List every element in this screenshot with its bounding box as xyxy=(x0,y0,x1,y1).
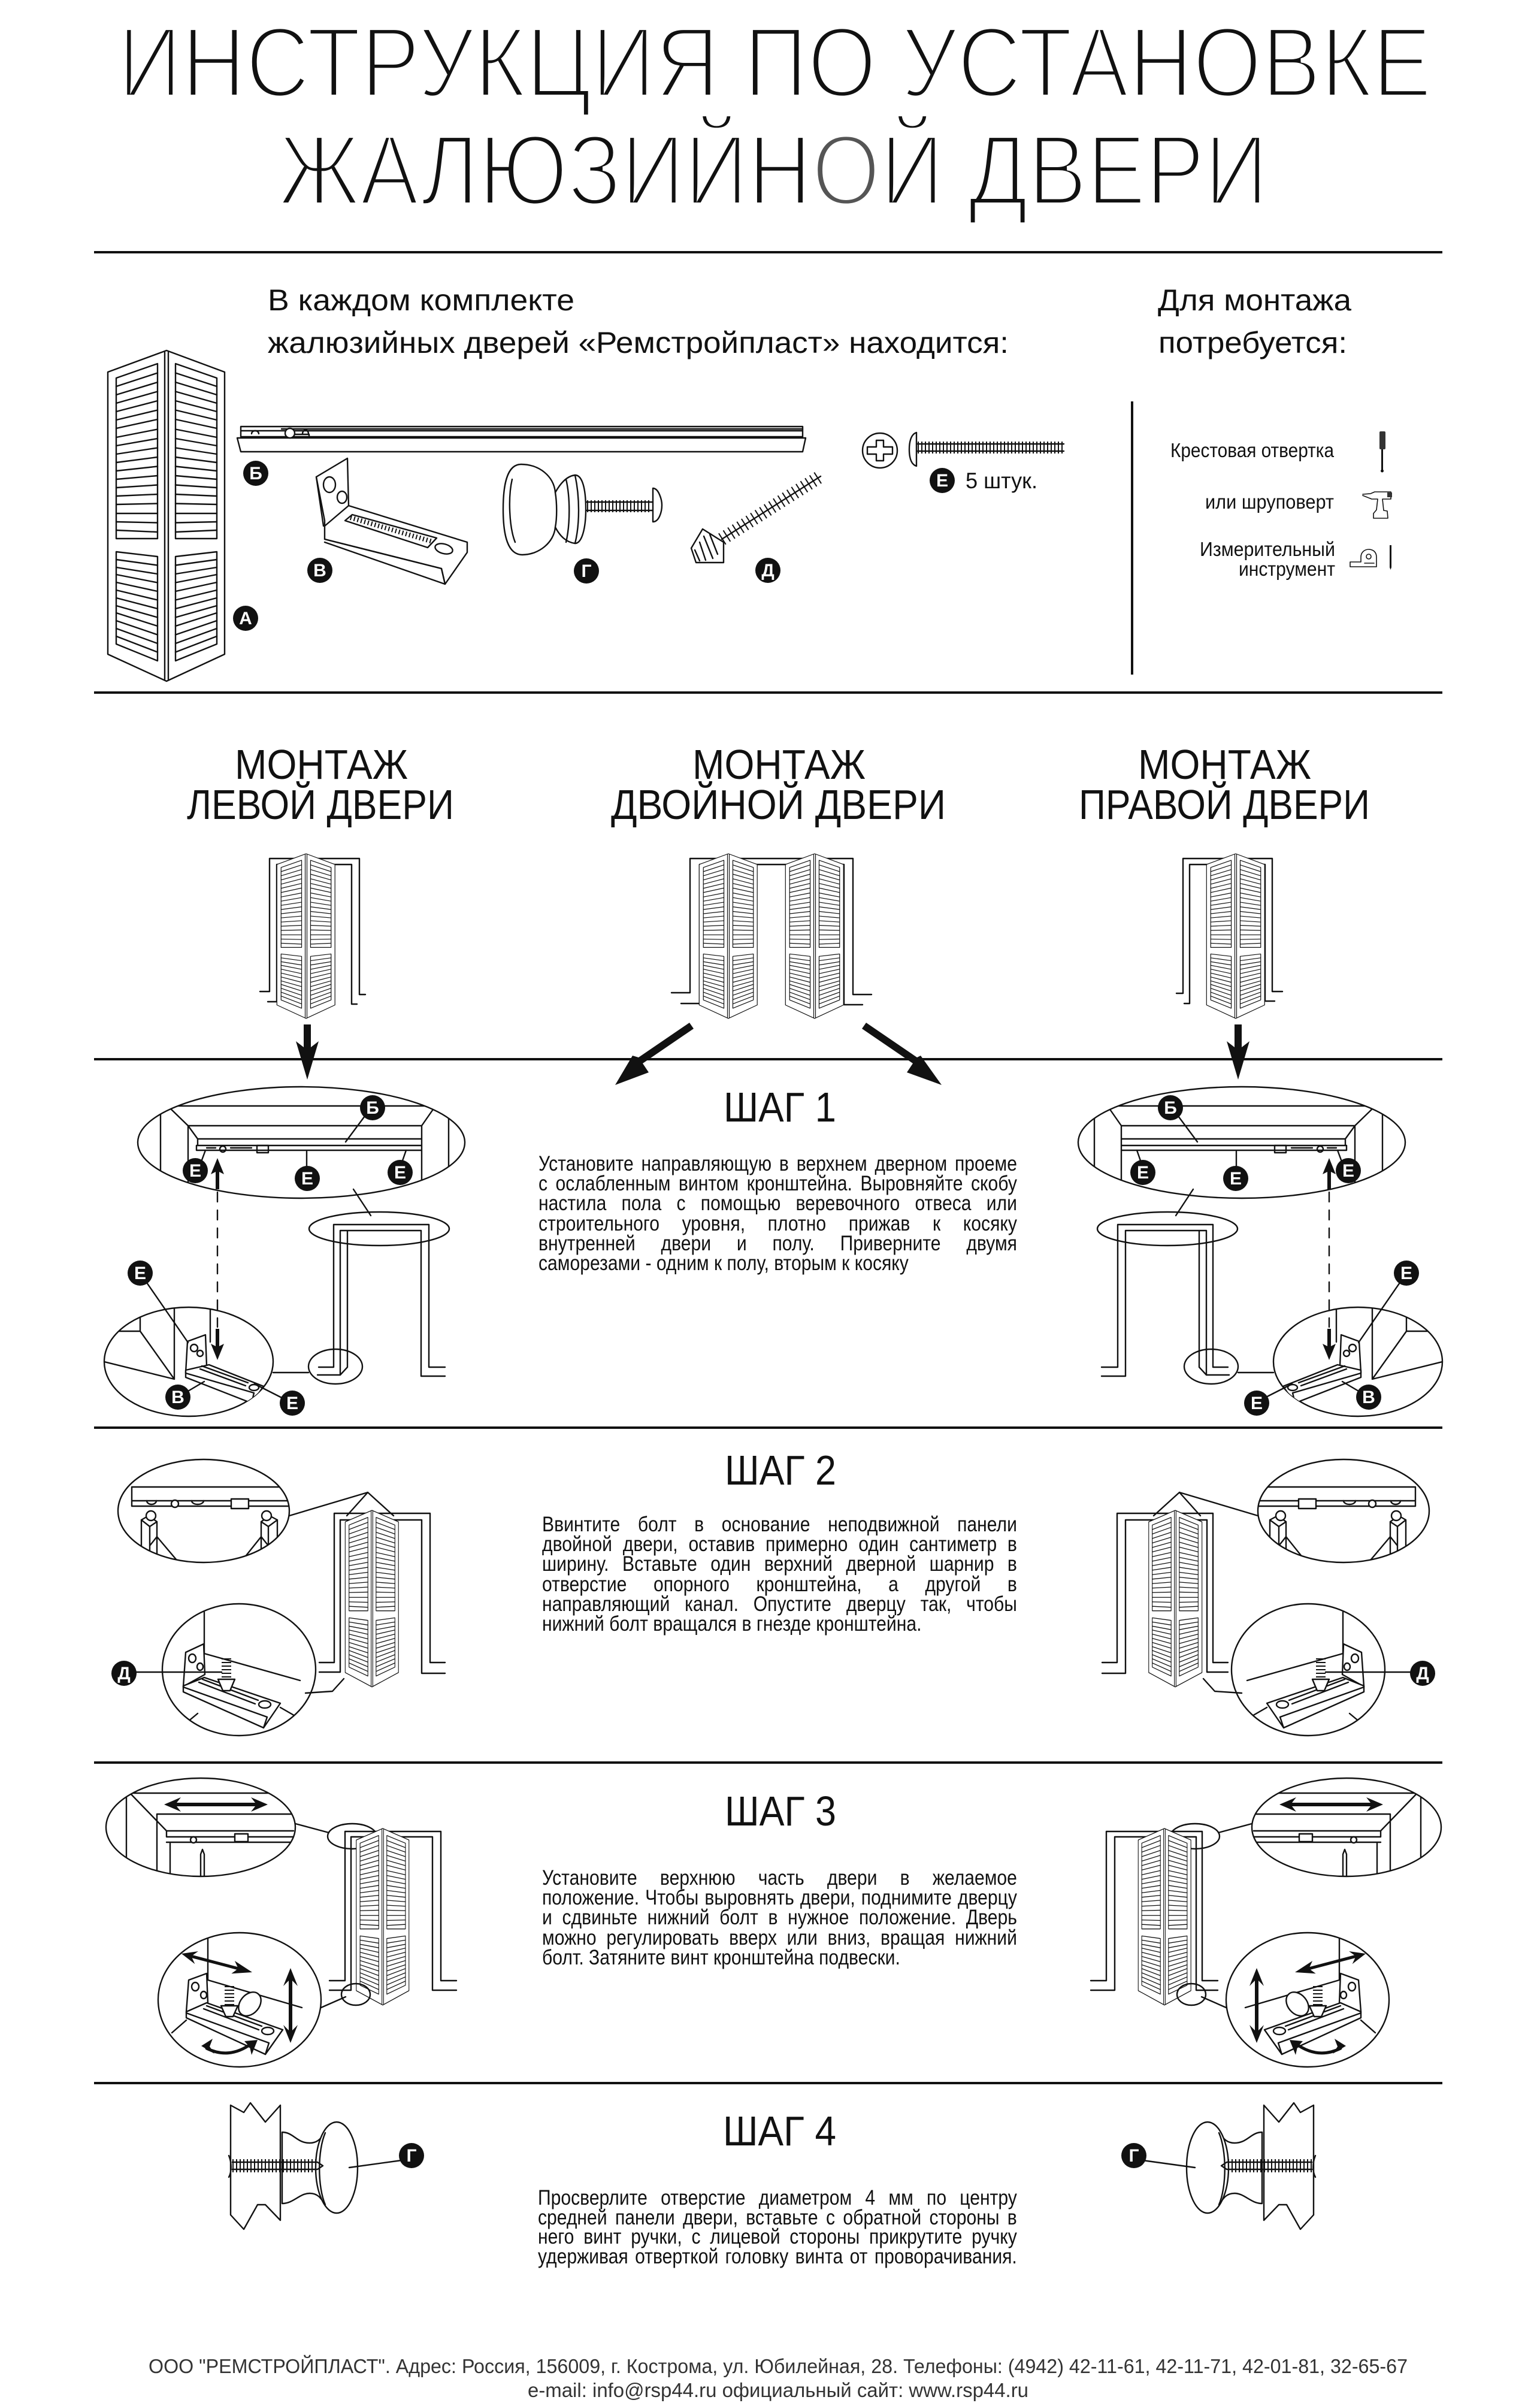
badge Б: Б xyxy=(249,464,262,483)
heading: right door xyxy=(1079,741,1370,828)
text block: step 4: удерживая отверткой головку винта от проворачивания. xyxy=(538,2245,1017,2268)
icon: drill xyxy=(1363,492,1392,518)
label: measuring tool xyxy=(1200,538,1335,580)
heading: step 1: ШАГ 1 xyxy=(724,1084,836,1131)
text block: step 2: двойной двери, оставив примерно один сантиметр в xyxy=(542,1533,1017,1556)
badge Е xyxy=(128,1261,153,1286)
text block: step 1: настила пола с помощью веревочного отвеса или xyxy=(538,1192,1017,1215)
badge Е xyxy=(183,1158,208,1183)
text block: step 3: и сдвиньте нижний болт в нужное положение. Дверь xyxy=(542,1906,1017,1929)
badge Б: Б xyxy=(1164,1098,1177,1118)
icon: bracket V xyxy=(316,458,467,584)
heading: step 4: ШАГ 4 xyxy=(723,2108,836,2154)
heading: double door xyxy=(611,741,946,828)
text block: step 4: Просверлите отверстие диаметром 4 мм по центру xyxy=(538,2186,1017,2209)
heading: left door: ЛЕВОЙ ДВЕРИ xyxy=(187,781,454,828)
label: quantity: 5 штук. xyxy=(966,468,1037,493)
icon: pencil xyxy=(1390,545,1391,570)
diagram: step 1 left xyxy=(102,1087,467,1416)
footer: ООО "РЕМСТРОЙПЛАСТ". Адрес: Россия, 156009, г. Кострома, ул. Юбилейная, 28. Телефоны: (4942) 42-11-61, 42-11-71, 42-01-81, 32-65-67 xyxy=(149,2355,1408,2377)
text block: step 2: направляющий канал. Опустите дверцу так, чтобы xyxy=(542,1592,1017,1616)
badge Д xyxy=(111,1661,137,1686)
heading: step 2: ШАГ 2 xyxy=(725,1447,836,1494)
title: ЖАЛЮЗИЙНОЙ ДВЕРИ xyxy=(279,114,1268,226)
heading: left door xyxy=(187,741,454,828)
text block: step 2: ширину. Вставьте один верхний дверной шарнир в xyxy=(542,1552,1017,1576)
badge Е xyxy=(1223,1166,1248,1191)
icon: tape measure xyxy=(1350,549,1376,567)
badge Д xyxy=(755,558,780,583)
badge Г: Г xyxy=(581,561,592,581)
text block: step 2 xyxy=(542,1513,1017,1636)
text block: step 3: Установите верхнюю часть двери в желаемое xyxy=(542,1866,1017,1890)
icon: door A xyxy=(108,350,225,681)
heading: step 3: ШАГ 3 xyxy=(725,1788,836,1834)
icon: screw D xyxy=(691,476,821,563)
badge Е: Е xyxy=(1400,1264,1412,1283)
panel: kit parts xyxy=(108,350,1064,681)
badge В xyxy=(1356,1385,1381,1410)
text block: step 3: положение. Чтобы выровнять двери, поднимите дверцу xyxy=(542,1886,1017,1909)
diagram: step 3 right xyxy=(1091,1778,1441,2067)
badge Е: Е xyxy=(1342,1161,1354,1181)
badge Б: Б xyxy=(366,1098,379,1118)
text block: step 3: болт. Затяните винт кронштейна подвески. xyxy=(542,1946,900,1969)
diagram: step 1 right xyxy=(1076,1087,1445,1416)
heading: right door: МОНТАЖ xyxy=(1138,741,1311,788)
badge A xyxy=(233,606,258,631)
badge A: А xyxy=(239,609,252,628)
icon: knob G xyxy=(503,464,662,555)
badge Д: Д xyxy=(761,561,774,581)
badge В xyxy=(307,558,332,583)
badge Е: Е xyxy=(936,471,948,491)
badge Г: Г xyxy=(1128,2146,1139,2166)
arrow: double door to right xyxy=(862,1023,942,1085)
badge Е xyxy=(295,1166,320,1191)
text block: step 1: саморезами - одним к полу, вторым к косяку xyxy=(538,1252,909,1275)
icon: screw E xyxy=(863,433,1064,468)
badge Е xyxy=(1244,1391,1269,1416)
text block: step 4: него винт ручки, с лицевой стороны прикрутите ручку xyxy=(538,2225,1017,2248)
heading: double door: МОНТАЖ xyxy=(692,741,866,788)
label: screwdriver: Крестовая отвертка xyxy=(1170,439,1335,461)
arrow: right door down xyxy=(1227,1024,1249,1080)
badge Е xyxy=(930,468,955,493)
diagram: step 3 left xyxy=(106,1778,456,2067)
badge В xyxy=(165,1385,190,1410)
heading: left door: МОНТАЖ xyxy=(235,741,408,788)
diagram: step 2 left xyxy=(111,1459,445,1736)
icon: rail B xyxy=(237,427,806,452)
label: measuring tool: Измерительный xyxy=(1200,538,1335,560)
badge Д: Д xyxy=(1416,1664,1429,1683)
heading: tools: Для монтажа xyxy=(1158,283,1351,317)
badge Е xyxy=(1130,1160,1155,1185)
badge В: В xyxy=(171,1388,184,1407)
badge В: В xyxy=(1362,1388,1375,1407)
badge Г: Г xyxy=(406,2146,417,2166)
diagram: right door in frame xyxy=(1176,854,1282,1018)
text block: step 2: отверстие опорного кронштейна, а другой в xyxy=(542,1573,1017,1596)
footer xyxy=(149,2355,1408,2401)
heading: tools xyxy=(1158,283,1351,359)
badge Г xyxy=(399,2143,424,2168)
badge Г xyxy=(574,558,599,584)
diagram: double door in frame xyxy=(671,854,872,1018)
badge Д xyxy=(1410,1661,1435,1686)
badge Е: Е xyxy=(1251,1394,1263,1413)
badge Г xyxy=(1121,2143,1146,2168)
arrow: double door to left xyxy=(615,1023,694,1085)
text block: step 3 xyxy=(542,1866,1017,1969)
text block: step 1: Установите направляющую в верхнем дверном проеме xyxy=(538,1152,1017,1175)
badge В: В xyxy=(313,561,326,581)
heading: double door: ДВОЙНОЙ ДВЕРИ xyxy=(611,781,946,828)
badge Е: Е xyxy=(189,1161,201,1181)
heading: kit contents: жалюзийных дверей «Ремстройпласт» находится: xyxy=(268,326,1009,359)
badge Е xyxy=(1394,1261,1419,1286)
badge Е: Е xyxy=(1137,1163,1149,1183)
diagram: step 4 right xyxy=(1121,2103,1315,2229)
text block: step 1: внутренней двери и полу. Приверните двумя xyxy=(538,1232,1017,1255)
badge Е: Е xyxy=(134,1264,146,1283)
icon: screwdriver xyxy=(1379,431,1385,472)
heading: right door: ПРАВОЙ ДВЕРИ xyxy=(1079,781,1370,828)
badge Е: Е xyxy=(286,1394,298,1413)
badge Е xyxy=(1336,1158,1361,1183)
arrow: left door down xyxy=(296,1024,319,1080)
badge Е xyxy=(280,1391,305,1416)
diagram: step 2 right xyxy=(1102,1459,1435,1736)
heading: kit contents xyxy=(268,283,1009,359)
title xyxy=(118,7,1432,226)
label: measuring tool: инструмент xyxy=(1239,558,1335,580)
heading: tools: потребуется: xyxy=(1158,326,1347,359)
label: drill: или шруповерт xyxy=(1205,491,1334,513)
badge Д: Д xyxy=(117,1664,131,1683)
text block: step 4: средней панели двери, вставьте с обратной стороны в xyxy=(538,2206,1017,2229)
badge Е xyxy=(388,1160,413,1185)
badge Б xyxy=(1158,1095,1183,1120)
heading: kit contents: В каждом комплекте xyxy=(268,283,574,317)
badge Б xyxy=(243,461,268,486)
text block: step 1: строительного уровня, плотно прижав к косяку xyxy=(538,1212,1017,1235)
panel: tools xyxy=(1158,283,1392,580)
text block: step 2: нижний болт вращался в гнезде кронштейна. xyxy=(542,1612,921,1636)
divider xyxy=(1131,401,1133,675)
text block: step 2: Ввинтите болт в основание неподвижной панели xyxy=(542,1513,1017,1536)
text block: step 3: можно регулировать вверх или вниз, вращая нижний xyxy=(542,1926,1017,1949)
badge Е: Е xyxy=(394,1163,406,1183)
footer: e-mail: info@rsp44.ru официальный сайт: www.rsp44.ru xyxy=(528,2379,1028,2401)
text block: step 1: с ослабленным винтом кронштейна. Выровняйте скобу xyxy=(538,1172,1017,1195)
badge Е: Е xyxy=(1230,1169,1242,1189)
diagram: left door in frame xyxy=(260,854,365,1018)
text block: step 4 xyxy=(538,2186,1017,2268)
badge Б xyxy=(360,1095,385,1120)
text block: step 1 xyxy=(538,1152,1017,1275)
diagram: step 4 left xyxy=(229,2103,424,2229)
badge Е: Е xyxy=(301,1169,313,1189)
